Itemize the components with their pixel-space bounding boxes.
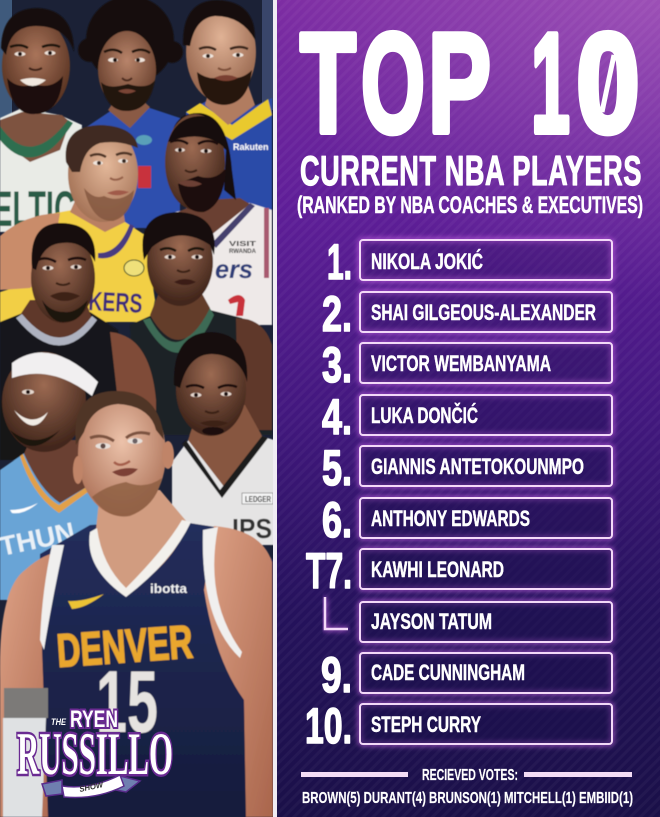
title: TOP 10: 1 <box>531 4 570 163</box>
row 10: STEPH CURRY <box>371 712 481 737</box>
logo: The Ryen Russillo Show: RYEN <box>70 706 118 733</box>
player: Victor Wembanyama: LEDGER <box>245 495 271 504</box>
row 2 <box>322 286 612 342</box>
row 2: 2. <box>322 286 352 342</box>
player: Shai Gilgeous-Alexander <box>0 352 100 600</box>
row 9 <box>321 647 612 703</box>
logo: The Ryen Russillo Show: THE <box>51 717 67 727</box>
row 4: 4. <box>322 389 352 445</box>
row 1: 1. <box>327 234 352 290</box>
footer: received votes <box>301 767 633 807</box>
player: Nikola Jokic: ibotta <box>150 582 188 596</box>
row 1: NIKOLA JOKIĆ <box>371 249 483 274</box>
footer: received votes: RECIEVED VOTES: <box>422 767 518 784</box>
row 6: 6. <box>322 492 352 548</box>
player: Luka Doncic <box>0 125 155 322</box>
panel: player photo collage <box>0 0 277 817</box>
player: Jayson Tatum <box>0 8 82 237</box>
player: Nikola Jokic <box>0 391 274 817</box>
row 3 <box>322 337 612 393</box>
row 3: VICTOR WEMBANYAMA <box>371 351 551 376</box>
player: Nikola Jokic: 15 <box>96 652 158 751</box>
player: Victor Wembanyama: IPS <box>232 513 272 544</box>
logo: The Ryen Russillo Show: SHOW <box>79 780 105 794</box>
row 6: ANTHONY EDWARDS <box>371 506 530 531</box>
tie marker arrow <box>325 597 348 629</box>
row 10 <box>305 698 612 754</box>
player: Victor Wembanyama <box>172 332 274 545</box>
title: TOP 10: P <box>428 4 491 163</box>
player: Cade Cunningham <box>78 0 183 228</box>
row T7: Jayson Tatum <box>360 602 612 642</box>
row 9: CADE CUNNINGHAM <box>371 660 525 685</box>
row T7: Jayson Tatum: JAYSON TATUM <box>371 609 492 634</box>
title: TOP 10: O <box>361 4 425 163</box>
player: Steph Curry <box>183 0 272 210</box>
row 1 <box>327 234 612 290</box>
player: Kawhi Leonard <box>165 113 272 325</box>
player: Kawhi Leonard: VISIT <box>229 239 257 248</box>
divider: white strip between photo and panel <box>273 0 277 817</box>
player: Nikola Jokic: DENVER <box>55 615 194 677</box>
player: Kawhi Leonard: ers <box>215 254 253 284</box>
row 5: 5. <box>322 440 352 496</box>
title: TOP 10: T <box>300 4 356 163</box>
ranking list <box>305 234 612 754</box>
title: TOP 10 <box>300 4 640 163</box>
row T7: Kawhi Leonard: T7. <box>306 543 352 599</box>
player: Steph Curry: Rakuten <box>233 142 269 152</box>
row 6 <box>322 492 612 548</box>
player: Giannis Antetokounmpo <box>0 223 156 420</box>
row T7: Kawhi Leonard <box>306 543 612 599</box>
title: TOP 10: 0 <box>576 4 640 163</box>
row 4 <box>322 389 612 445</box>
row 5 <box>322 440 612 496</box>
player: Luka Doncic: KERS <box>88 286 143 319</box>
panel: ranking background <box>277 0 660 817</box>
logo: The Ryen Russillo Show: RUSSILLO <box>17 721 173 787</box>
player: Anthony Edwards <box>130 212 272 435</box>
logo: The Ryen Russillo Show <box>17 706 173 798</box>
row 3: 3. <box>322 337 352 393</box>
row 4: LUKA DONČIĆ <box>371 403 478 428</box>
row T7: Kawhi Leonard: KAWHI LEONARD <box>371 557 504 582</box>
row 10: 10. <box>305 698 352 754</box>
row 9: 9. <box>321 647 352 703</box>
player: Kawhi Leonard: RWANDA <box>229 248 256 255</box>
